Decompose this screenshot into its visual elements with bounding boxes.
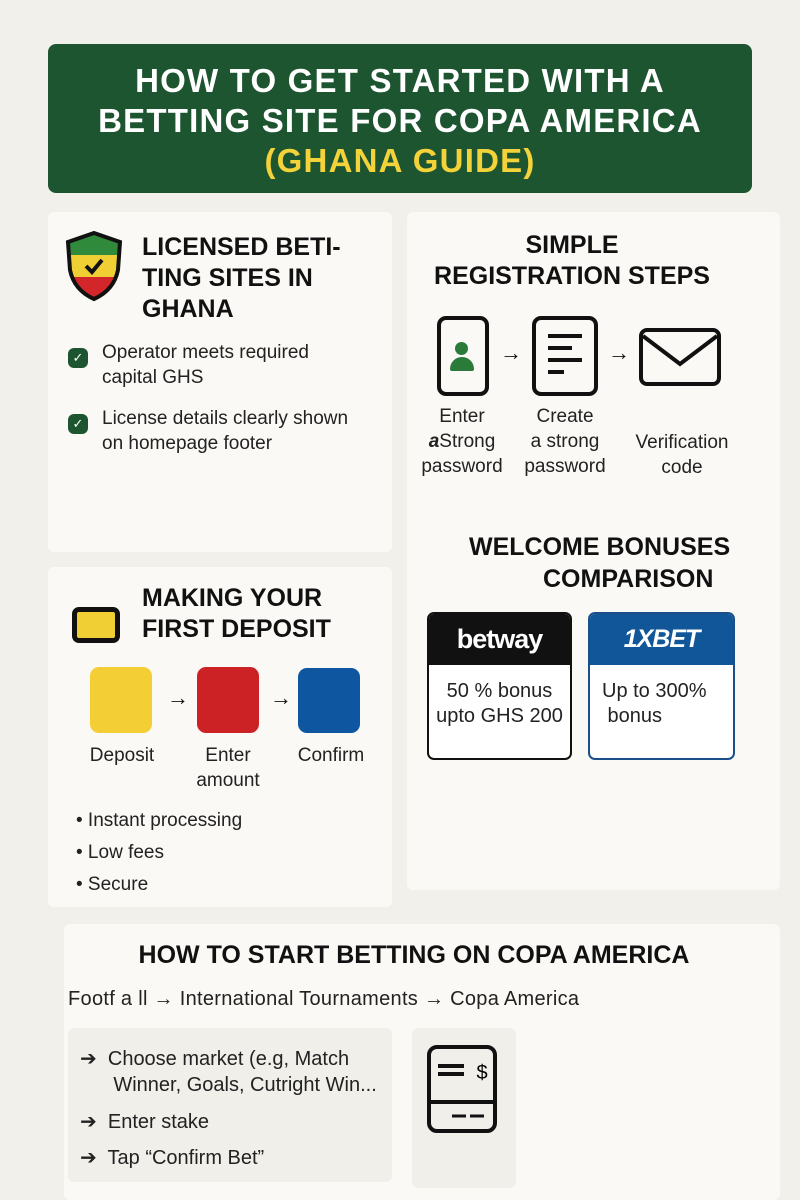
registration steps: password	[421, 456, 503, 477]
checklist: License details clearly shown	[102, 408, 348, 429]
bullets: • Instant processing	[76, 810, 242, 831]
checklist: ✓	[73, 350, 83, 365]
heading: TING SITES IN	[142, 264, 313, 292]
icon: wallet	[72, 607, 120, 643]
card: 1xbet: 1XBET	[624, 625, 699, 653]
heading: registration: REGISTRATION STEPS	[434, 262, 710, 290]
checklist: ✓	[73, 416, 83, 431]
heading: MAKING YOUR	[142, 584, 322, 612]
icon: bet slip	[412, 1028, 516, 1188]
card: 1xbet: Up to 300%	[602, 680, 707, 702]
checklist: on homepage footer	[102, 433, 272, 454]
steps box	[68, 1028, 392, 1182]
icon: shield	[66, 230, 122, 302]
panel: start betting	[64, 924, 780, 1200]
card: betway: upto GHS 200	[436, 705, 563, 727]
deposit steps: →	[270, 685, 292, 710]
deposit steps	[90, 667, 364, 791]
heading: bonuses: WELCOME BONUSES	[469, 533, 730, 561]
steps box: Winner, Goals, Cutright Win...	[113, 1074, 377, 1096]
card: 1xbet	[588, 612, 735, 760]
card: betway: betway	[457, 624, 542, 654]
registration steps: a strong	[531, 431, 599, 452]
registration steps	[421, 316, 728, 478]
heading: FIRST DEPOSIT	[142, 615, 331, 643]
heading: GHANA	[142, 295, 234, 323]
title banner: BETTING SITE FOR COPA AMERICA	[98, 102, 702, 139]
card: betway	[427, 612, 572, 760]
bullets	[76, 810, 242, 895]
checklist	[68, 342, 348, 454]
title banner	[48, 44, 752, 193]
bullets: • Low fees	[76, 842, 164, 863]
heading	[142, 584, 331, 643]
heading: HOW TO START BETTING ON COPA AMERICA	[139, 941, 689, 969]
heading: LICENSED BETI-	[142, 233, 341, 261]
heading: registration: SIMPLE	[525, 231, 619, 259]
deposit steps: →	[167, 685, 189, 710]
registration steps: →	[608, 340, 630, 365]
panel: registration + bonuses	[407, 212, 780, 890]
heading	[142, 233, 341, 323]
deposit steps: Enter	[205, 745, 251, 766]
registration steps: password	[524, 456, 606, 477]
deposit steps: Confirm	[298, 745, 364, 766]
icon: bet slip: $	[476, 1062, 488, 1084]
panel: first deposit	[48, 567, 392, 907]
title banner: HOW TO GET STARTED WITH A	[135, 62, 665, 99]
registration steps: aStrong	[429, 431, 495, 452]
card: betway: 50 % bonus	[447, 680, 552, 702]
registration steps: Create	[536, 406, 594, 427]
heading: registration	[434, 231, 710, 290]
checklist: capital GHS	[102, 367, 203, 388]
checklist: Operator meets required	[102, 342, 309, 363]
bullets: • Secure	[76, 874, 148, 895]
registration steps: Verification	[636, 432, 728, 453]
registration steps: →	[500, 340, 522, 365]
breadcrumb: Footf a ll → International Tournaments → Copa America	[68, 988, 579, 1010]
deposit steps: amount	[196, 770, 260, 791]
registration steps: code	[661, 457, 703, 478]
panel: registration + bonuses: COMPARISON	[543, 565, 713, 593]
card: 1xbet: bonus	[608, 705, 662, 727]
steps box: ➔ Choose market (e.g, Match	[80, 1048, 349, 1070]
steps box: ➔ Tap “Confirm Bet”	[80, 1147, 264, 1169]
panel: licensed sites	[48, 212, 392, 552]
title banner: (GHANA GUIDE)	[264, 142, 536, 179]
registration steps: Enter	[439, 406, 485, 427]
deposit steps: Deposit	[90, 745, 154, 766]
steps box: ➔ Enter stake	[80, 1111, 209, 1133]
